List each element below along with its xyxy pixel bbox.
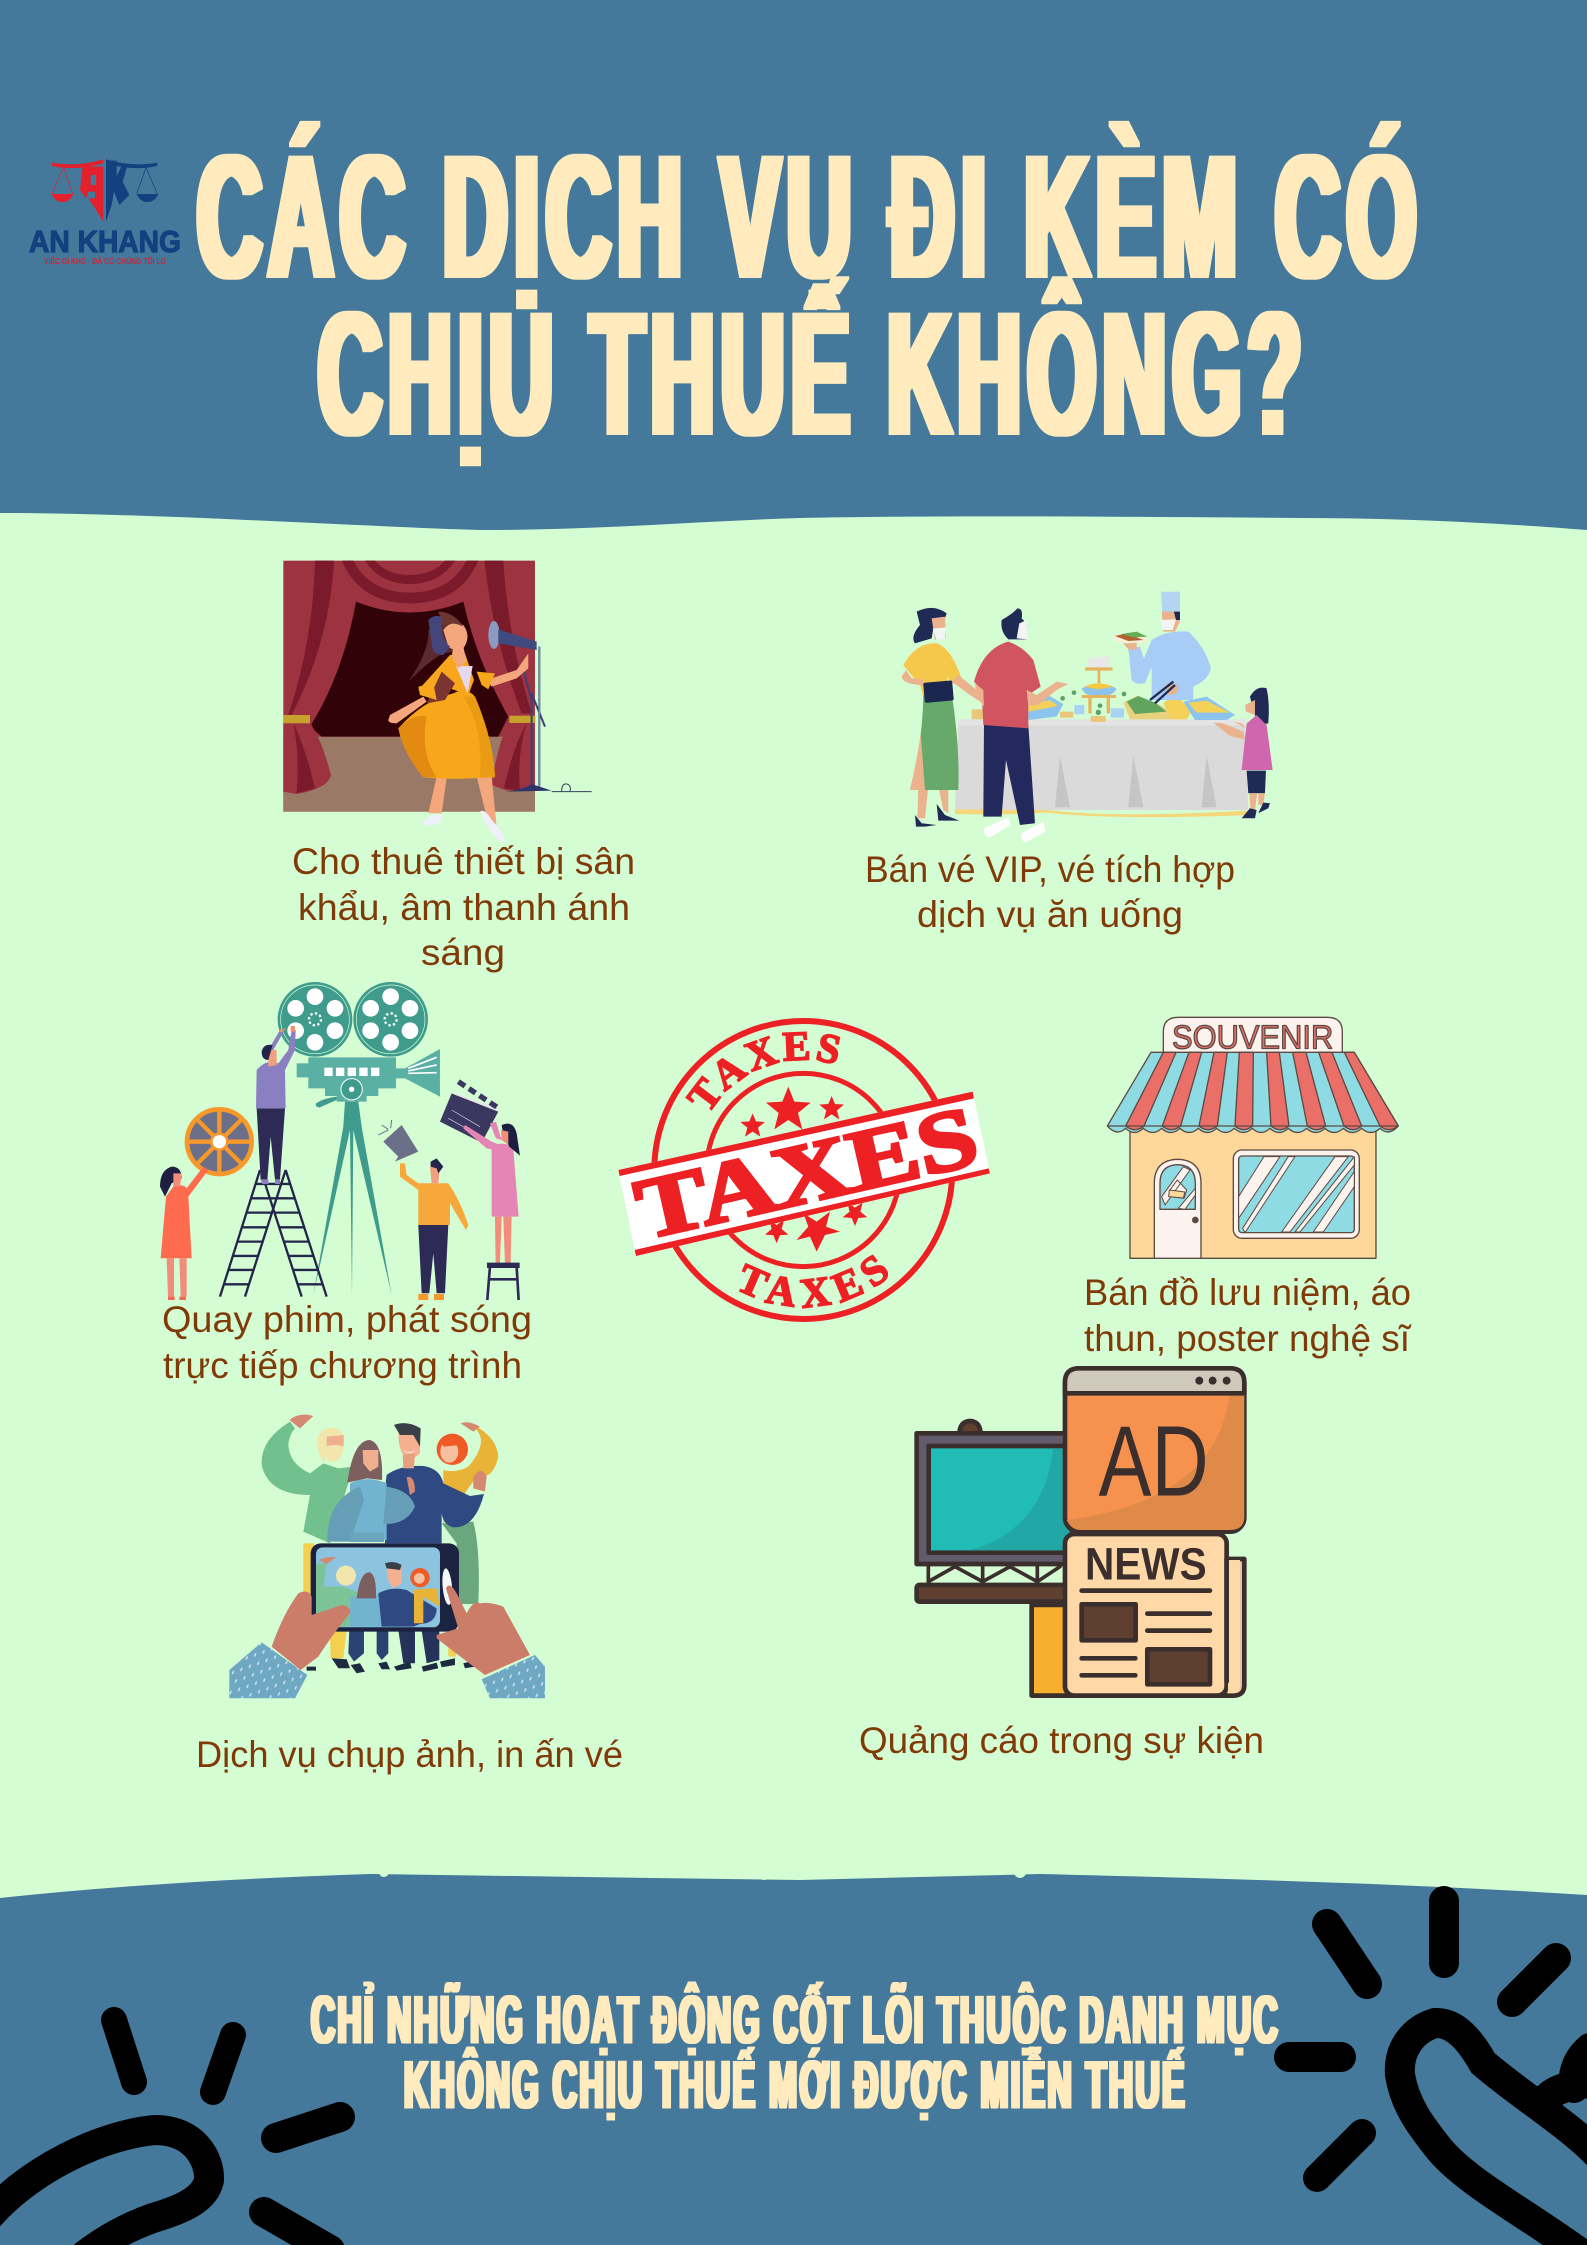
- caption: stage equipment: Cho thuê thiết bị sân: [292, 841, 635, 882]
- stamp: taxes: [618, 1018, 990, 1322]
- woman: [917, 787, 948, 818]
- right hand: [437, 1586, 530, 1675]
- logo wordmark: AN KHANG: [29, 224, 181, 259]
- caption: stage equipment: khẩu, âm thanh ánh: [298, 887, 630, 928]
- footer band: [0, 1866, 1587, 2245]
- stars: [740, 1087, 867, 1252]
- billboard: [928, 1564, 1060, 1582]
- chef: [1161, 592, 1180, 613]
- caption: VIP tickets: Bán vé VIP, vé tích hợp: [865, 849, 1235, 890]
- blue woman: [350, 1479, 387, 1540]
- illustration: singer on stage: [283, 561, 592, 843]
- caption: filming: [162, 1299, 532, 1386]
- green sweater man: [262, 1422, 353, 1543]
- microphone: [488, 621, 500, 649]
- caption: photo services: Dịch vụ chụp ảnh, in ấn vé: [196, 1734, 623, 1775]
- clapperboard: [440, 1093, 498, 1143]
- doodle: left sun: [0, 2020, 340, 2245]
- stamp main text: TAXES: [627, 1087, 986, 1258]
- caption: souvenirs: thun, poster nghệ sĩ: [1084, 1318, 1412, 1359]
- mic stand: [523, 647, 545, 787]
- footer note: [311, 1981, 1280, 2123]
- caption: filming: trực tiếp chương trình: [163, 1345, 522, 1386]
- stamp arc text bottom: TAXES: [739, 1254, 888, 1309]
- newspaper: [1200, 1559, 1244, 1696]
- caption: filming: Quay phim, phát sóng: [162, 1299, 532, 1340]
- caption: VIP tickets: [865, 849, 1235, 935]
- window: [1233, 1150, 1359, 1238]
- illustration: film crew: [160, 982, 520, 1300]
- shop sign: SOUVENIR: [1172, 1019, 1333, 1056]
- legs and feet: [303, 1543, 314, 1597]
- singer: [428, 777, 447, 813]
- film reels: [278, 982, 428, 1057]
- door: [1154, 1159, 1201, 1258]
- ad window: [1065, 1368, 1244, 1532]
- illustration: souvenir shop: [1107, 1017, 1398, 1258]
- man: [983, 725, 1035, 825]
- caption: advertising: Quảng cáo trong sự kiện: [859, 1720, 1264, 1761]
- caption: stage equipment: sáng: [421, 932, 505, 973]
- AD text: AD: [1099, 1405, 1209, 1517]
- phone screen people: [316, 1557, 440, 1627]
- logo emblem: [52, 159, 158, 222]
- caption: VIP tickets: dịch vụ ăn uống: [917, 894, 1183, 935]
- logo: An Khang: [29, 159, 181, 266]
- man with megaphone: [418, 1225, 448, 1293]
- illustration: advertising: [917, 1368, 1244, 1696]
- girl: [1250, 688, 1269, 725]
- doodle: right hand sparkle: [1289, 1901, 1587, 2245]
- food: [1028, 696, 1063, 720]
- logo tagline: VIỆC GÌ KHÓ - ĐÃ CÓ CHÚNG TÔI LO: [44, 257, 166, 266]
- caption: stage equipment: [292, 841, 635, 973]
- NEWS text: NEWS: [1085, 1538, 1207, 1589]
- awning: [1107, 1052, 1398, 1132]
- band: [618, 1092, 990, 1256]
- caption: souvenirs: Bán đồ lưu niệm, áo: [1084, 1272, 1411, 1313]
- navy man: [385, 1466, 484, 1543]
- stamp arc text top: TAXES: [685, 1032, 840, 1111]
- header band: [0, 0, 1587, 530]
- woman with clapper: [495, 1217, 512, 1263]
- title: [197, 120, 1423, 472]
- caption: souvenirs: [1084, 1272, 1412, 1359]
- phone: [311, 1543, 459, 1632]
- person on ladder: [257, 1108, 285, 1180]
- left hand: [272, 1591, 350, 1670]
- woman with reel: [187, 1109, 252, 1174]
- illustration: group selfie: [229, 1415, 545, 1698]
- ladder: [220, 1170, 327, 1297]
- illustration: buffet: [902, 592, 1273, 843]
- yellow woman: [443, 1425, 498, 1523]
